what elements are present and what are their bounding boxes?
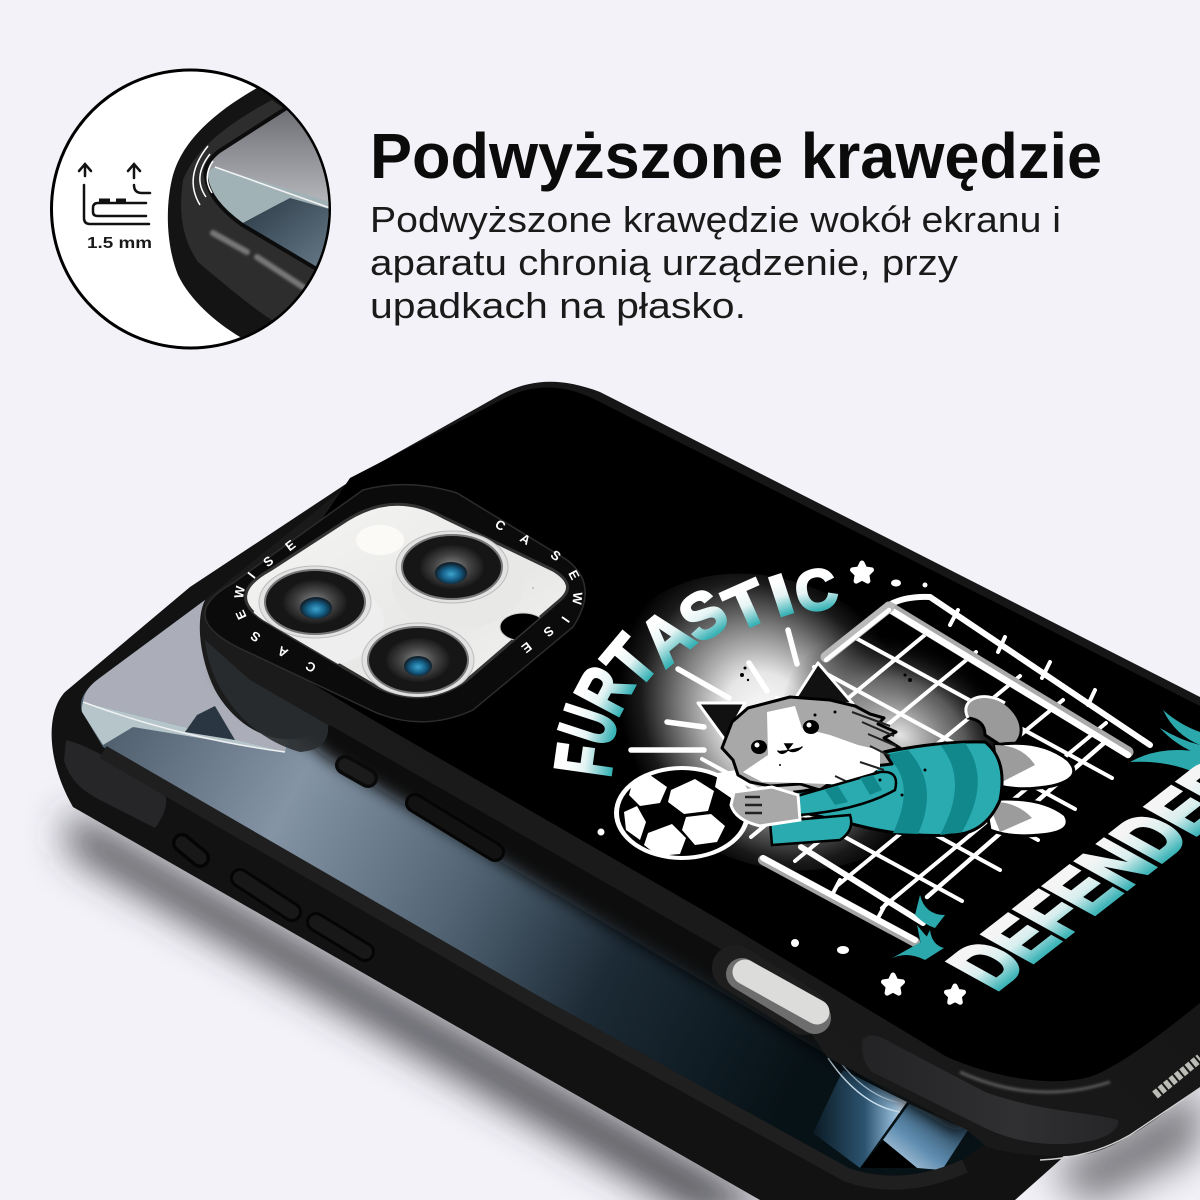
- frame rim line: [1040, 1088, 1200, 1160]
- jersey: [795, 742, 1002, 835]
- icon: raised edge diagram: [79, 164, 150, 224]
- CASEWISE lettering on ring: C: [492, 516, 509, 534]
- title arc: FURTASTIC: I: [761, 562, 801, 629]
- soccer ball: [614, 766, 750, 860]
- face white fur: [743, 706, 880, 785]
- dots: [598, 580, 928, 954]
- CASEWISE lettering on ring: S: [540, 623, 557, 640]
- rays: [631, 630, 797, 750]
- title arc: FURTASTIC: C: [789, 555, 843, 627]
- title arc: FURTASTIC: S: [667, 574, 740, 657]
- title arc: FURTASTIC: [539, 555, 843, 781]
- eyes: [751, 740, 767, 754]
- microphone hole: [500, 612, 540, 640]
- CASEWISE lettering on ring: I: [559, 614, 573, 625]
- body text: [370, 199, 1061, 326]
- glow behind the net: [745, 592, 1055, 878]
- bump shading: [254, 611, 340, 664]
- raised edge arcs: [193, 146, 213, 205]
- shadow beneath the phones: [70, 812, 1200, 1200]
- camera ring outer: [205, 485, 585, 722]
- lower arm: [770, 815, 851, 845]
- rear phone: [52, 470, 1200, 1200]
- CASEWISE lettering on ring: W: [231, 584, 248, 600]
- rear phone frame: [52, 470, 1200, 1200]
- label: 1.5 mm: 1.5 mm: [87, 235, 152, 252]
- lens A: [259, 566, 371, 638]
- CASEWISE lettering on ring: E: [518, 639, 535, 656]
- artwork: Furtastic Defender: [539, 516, 1200, 1002]
- stars: [852, 563, 964, 1002]
- goal frame: [763, 597, 1150, 942]
- CASEWISE lettering on ring: E: [282, 537, 299, 554]
- bottom corner bumper: [862, 1035, 1118, 1144]
- goal net: [702, 629, 1112, 908]
- lens B: [396, 531, 508, 603]
- title arc: FURTASTIC: A: [625, 594, 707, 680]
- teal grass: [889, 710, 1200, 960]
- head with fur: [722, 697, 900, 790]
- CASEWISE lettering on ring: S: [260, 553, 277, 570]
- frame highlight: [960, 1072, 1110, 1092]
- title arc: FURTASTIC: T: [588, 622, 674, 702]
- bumper corner left: [205, 640, 328, 752]
- soft shade under front phone: [215, 640, 1010, 1135]
- cat goalkeeper: [614, 663, 1074, 860]
- CASEWISE lettering on ring: I: [244, 569, 258, 581]
- body text: Podwyższone krawędzie wokół ekranu i: [370, 199, 1061, 240]
- corner close-up of the case: [168, 80, 340, 337]
- recess and side buttons: [345, 765, 495, 852]
- CASEWISE lettering on ring: S: [548, 547, 564, 564]
- screen reflection: [82, 600, 300, 752]
- head ears: [698, 703, 745, 740]
- mouth: [778, 744, 802, 753]
- black case back: [240, 387, 1200, 1081]
- hind legs: [995, 743, 1074, 789]
- callout: raised edge detail circle: [52, 70, 340, 348]
- rear phone screen: [81, 600, 1100, 1175]
- flash: [356, 525, 404, 555]
- speaker grille: [1155, 1058, 1200, 1095]
- CASEWISE lettering on ring: [231, 516, 585, 676]
- speckles: [740, 666, 926, 796]
- CASEWISE lettering on ring: E: [565, 568, 583, 583]
- glove: [731, 787, 800, 826]
- title arc: FURTASTIC: F: [539, 740, 632, 781]
- front phone frame: [200, 382, 1200, 1156]
- tail: [966, 697, 1021, 748]
- CASEWISE lettering on ring: S: [247, 628, 263, 645]
- charging port: [735, 968, 817, 1018]
- title arc: FURTASTIC: U: [543, 697, 635, 754]
- CASEWISE lettering on ring: E: [232, 608, 250, 622]
- CASEWISE lettering on ring: W: [569, 592, 585, 606]
- CASEWISE lettering on ring: A: [274, 643, 291, 661]
- heading: Podwyższone krawędzie: Podwyższone krawędzie: [370, 120, 1102, 192]
- glow behind the cat: [550, 516, 990, 928]
- rear phone highlight along frame: [103, 752, 965, 1183]
- CASEWISE lettering on ring: C: [302, 658, 319, 676]
- fur marks: [835, 712, 896, 786]
- title arc: FURTASTIC: T: [714, 567, 778, 645]
- lens C: [362, 623, 474, 697]
- rear phone corner bumper: [64, 740, 166, 828]
- title arc: FURTASTIC: R: [560, 654, 649, 726]
- screen light rays: [813, 1058, 968, 1170]
- rear phone side buttons: [182, 843, 365, 952]
- sleeve stripes: [825, 775, 882, 805]
- front phone: [200, 382, 1200, 1160]
- camera island: [205, 485, 585, 722]
- CASEWISE lettering on ring: A: [517, 530, 534, 548]
- camera plate: [246, 504, 568, 697]
- body text: aparatu chronią urządzenie, przy: [370, 242, 958, 283]
- sleeve: [797, 772, 896, 815]
- body text: upadkach na płasko.: [370, 285, 746, 326]
